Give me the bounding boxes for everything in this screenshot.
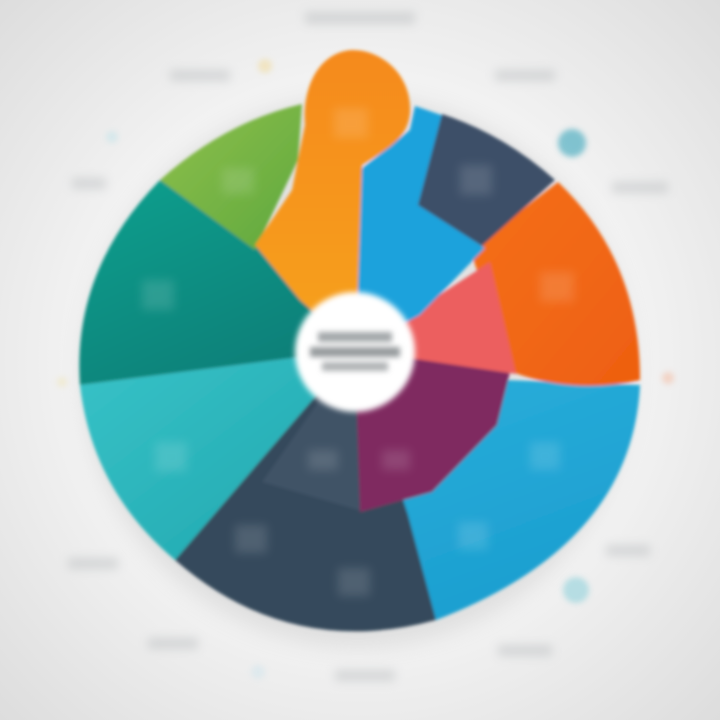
icon: purple: [382, 450, 410, 470]
centre circle: [295, 292, 415, 412]
icon: slate segment: [460, 165, 492, 195]
outer labels: [68, 12, 668, 681]
label: bottom left: [148, 638, 198, 649]
segment: blue lower right: [355, 350, 640, 620]
segment glow marks: [142, 108, 574, 596]
label: bottom right: [498, 645, 552, 656]
label: bottom centre: [335, 670, 395, 681]
icon: dark teal segment: [142, 280, 174, 310]
segment: dark teal: [79, 180, 355, 385]
accent dots: [57, 59, 674, 679]
icon: light teal segment: [155, 442, 187, 472]
icon: orange segment: [334, 108, 368, 138]
segment: slate top: [418, 114, 555, 246]
segment: green: [160, 104, 302, 250]
segment: navy underlay: [175, 350, 430, 560]
icon: blue lower segment: [530, 442, 560, 470]
label: lower left: [68, 558, 118, 569]
segment: blue top: [355, 106, 485, 350]
segment: navy inner: [262, 350, 365, 512]
segment: light teal: [80, 350, 355, 560]
label: upper left: [170, 70, 230, 81]
wheel shadow: [82, 96, 634, 648]
icon: navy segment right: [338, 568, 370, 596]
icon: green segment: [222, 168, 254, 194]
segment: orange top: [255, 50, 410, 350]
dot: yellow top: [258, 59, 272, 73]
icon: blue lower inner: [458, 522, 488, 550]
label: lower right: [606, 545, 650, 556]
dot: orange right: [662, 372, 674, 384]
segment: purple: [355, 350, 510, 512]
icon: navy inner: [308, 450, 338, 470]
icon: orange right segment: [540, 272, 574, 302]
label: right: [612, 182, 668, 193]
segment: coral: [355, 262, 516, 374]
dot: pale blue bottom: [251, 665, 265, 679]
icon: navy segment left: [235, 525, 267, 553]
dot: teal upper right: [558, 129, 586, 157]
dot: teal lower right: [563, 577, 589, 603]
segment: orange right: [470, 182, 640, 386]
dot: pale blue left: [106, 131, 118, 143]
label: upper right: [495, 70, 555, 81]
dot: pale yellow left: [57, 377, 67, 387]
wheel chart: [79, 50, 640, 631]
label: left: [72, 178, 106, 189]
segment: navy bottom: [175, 480, 436, 631]
label: top: [305, 12, 415, 24]
centre label: [310, 332, 400, 371]
